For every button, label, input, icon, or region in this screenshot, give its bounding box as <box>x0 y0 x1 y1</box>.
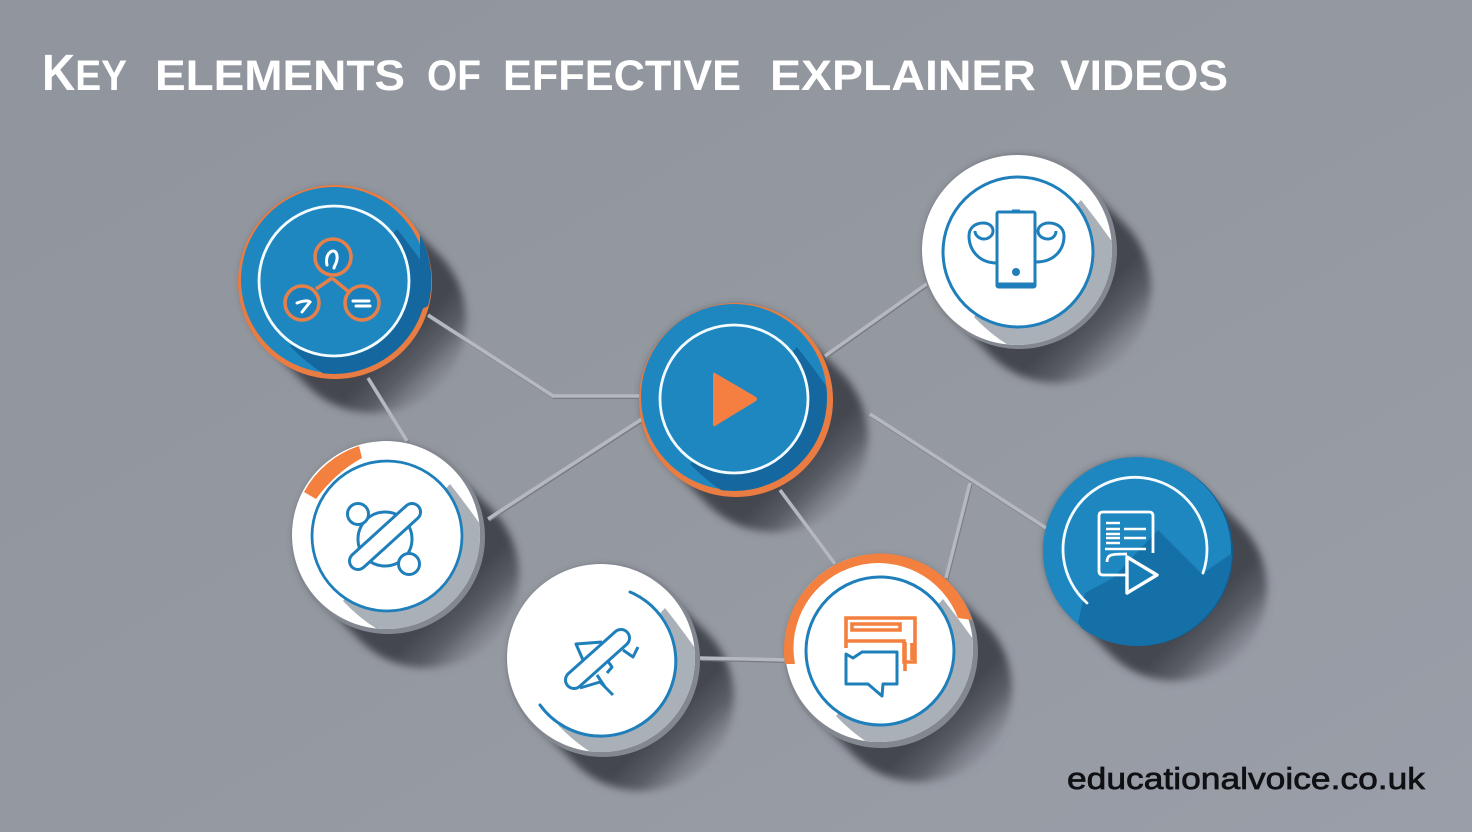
icon: document <box>1099 512 1153 575</box>
ring <box>312 461 462 611</box>
title: OF <box>427 52 481 100</box>
title: EFFECTIVE <box>503 52 741 100</box>
icon: orange panel <box>846 618 915 671</box>
inner long shadow <box>290 229 423 374</box>
inner long shadow <box>1078 530 1232 646</box>
ring <box>806 577 954 725</box>
disc <box>1045 458 1233 646</box>
title: ELEMENTS <box>155 52 405 100</box>
long shadows behind the buttons <box>335 251 1175 698</box>
inner long shadow <box>974 200 1112 345</box>
inner long shadow <box>558 608 695 752</box>
node: bottom white chat button <box>784 554 978 748</box>
disc <box>921 153 1117 349</box>
title: EXPLAINER <box>770 52 1036 100</box>
icon: speech bubble <box>846 652 897 696</box>
icon: three linked circles <box>285 239 379 320</box>
title: KEY <box>42 44 127 101</box>
orange rim disc <box>639 303 833 497</box>
disc <box>784 554 978 748</box>
title: VIDEOS <box>1060 52 1228 100</box>
connector lines <box>368 283 1047 661</box>
node: bottom white pencil button <box>507 564 700 757</box>
disc <box>506 563 700 757</box>
node: centre blue play button <box>639 303 833 497</box>
node: left white crossed network button <box>292 441 485 634</box>
node: top-left blue network button <box>238 185 432 379</box>
orange rim disc <box>238 185 432 379</box>
orange arc <box>784 554 972 664</box>
inner long shadow <box>343 484 480 629</box>
ring <box>660 325 808 473</box>
orange accent <box>304 446 362 499</box>
node: right blue document play button <box>1043 457 1233 646</box>
ring <box>259 206 409 356</box>
inner long shadow <box>690 347 827 491</box>
icon: pencil and paper <box>574 638 638 695</box>
website label: educationalvoice.co.uk <box>1067 761 1426 796</box>
icon: play triangle <box>713 373 757 426</box>
icon: phone with loops <box>969 211 1064 287</box>
icon: crossed nodes <box>348 504 420 574</box>
ring <box>943 177 1093 327</box>
title <box>42 44 1228 101</box>
ring arc <box>1063 477 1207 603</box>
node: top-right white phone button <box>922 155 1117 349</box>
icon: play outline <box>1127 557 1157 593</box>
ring face <box>527 585 677 735</box>
inner long shadow <box>836 599 973 742</box>
disc <box>291 440 485 634</box>
ring arc <box>540 592 676 736</box>
